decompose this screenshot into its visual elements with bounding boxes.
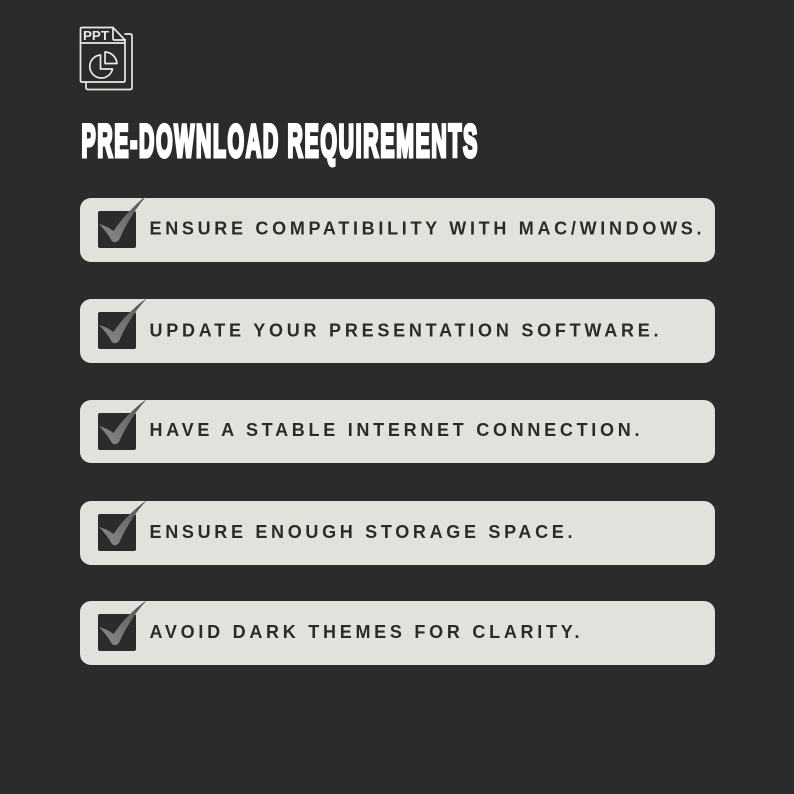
icon: checkbox 2 bbox=[98, 298, 147, 349]
icon: checkbox 4 bbox=[98, 500, 147, 551]
text 4: ENSURE ENOUGH STORAGE SPACE. bbox=[150, 522, 572, 542]
icon: checkbox 5 bbox=[98, 600, 147, 651]
icon: checkbox 3 bbox=[98, 399, 147, 450]
title: PRE-DOWNLOAD REQUIREMENTS bbox=[82, 117, 477, 167]
panel: requirement 3 bbox=[80, 399, 715, 463]
text 2: UPDATE YOUR PRESENTATION SOFTWARE. bbox=[150, 320, 658, 340]
icon: PPT document bbox=[80, 28, 132, 90]
text 3: HAVE A STABLE INTERNET CONNECTION. bbox=[150, 420, 640, 440]
icon: checkbox 1 bbox=[98, 195, 147, 248]
panel: requirement 4 bbox=[80, 500, 715, 565]
panel: requirement 2 bbox=[80, 298, 715, 363]
panel: requirement 1 bbox=[80, 195, 715, 262]
icon: PPT document: PPT bbox=[83, 28, 109, 43]
text 1: ENSURE COMPATIBILITY WITH MAC/WINDOWS. bbox=[150, 218, 702, 238]
panel: requirement 5 bbox=[80, 600, 715, 665]
text 5: AVOID DARK THEMES FOR CLARITY. bbox=[150, 622, 580, 642]
